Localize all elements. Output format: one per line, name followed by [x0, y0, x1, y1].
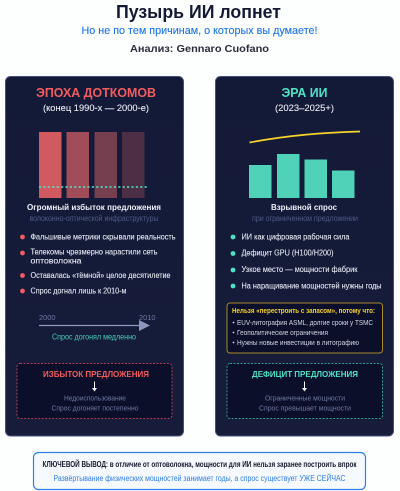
- callout heading: oversupply: ИЗБЫТОК ПРЕДЛОЖЕНИЯ: [43, 369, 149, 379]
- title: Пузырь ИИ лопнет: [116, 1, 281, 22]
- timeline arrow 2000 to 2010: 2010: [139, 313, 155, 322]
- author line: Анализ: Gennaro Cuofano: [130, 43, 269, 55]
- bullet list: dot-com causes: Телекомы чрезмерно нарастили сеть: [30, 248, 158, 256]
- chart caption: oversupply: Огромный избыток предложения: [27, 202, 161, 212]
- chart sub-caption: demand: при ограниченном предложении: [252, 214, 358, 223]
- chart sub-caption: oversupply: волоконно-оптической инфраструктуры: [30, 214, 159, 223]
- bullet list: dot-com causes: Фальшивые метрики скрывали реальность: [30, 232, 176, 242]
- callout heading: why no pre-building: Нельзя «перестроить с запасом», потому что:: [232, 306, 375, 315]
- callout list: reasons: Нужны новые инвестиции в литографию: [237, 338, 359, 347]
- callout text: oversupply: Недоиспользование: [64, 394, 126, 402]
- bar chart: oversupply: [39, 132, 148, 198]
- bullet list: AI causes: ИИ как цифровая рабочая сила: [242, 232, 350, 242]
- bullet list: dot-com causes: Спрос догнал лишь к 2010-м: [30, 286, 127, 296]
- panel: dot-com era: [6, 76, 184, 436]
- key takeaway detail: Развёртывание физических мощностей занимает годы, а спрос существует УЖЕ СЕЙЧАС: [54, 474, 346, 483]
- period: dot-com era: (конец 1990-х — 2000-е): [43, 103, 149, 113]
- timeline arrow 2000 to 2010: 2000: [39, 313, 55, 322]
- callout: deficit: [227, 364, 382, 418]
- bullet list: dot-com causes: Оставалась «тёмной» целое десятилетие: [30, 271, 171, 280]
- callout: oversupply: [17, 364, 172, 418]
- callout list: reasons: Геополитические ограничения: [237, 328, 328, 337]
- callout: oversupply: Спрос догоняет постепенно: [52, 404, 138, 412]
- bullet list: AI causes: [231, 232, 382, 290]
- period: AI era: (2023–2025+): [275, 103, 334, 113]
- panel: AI era: [216, 76, 394, 436]
- subtitle: Но не по тем причинам, о которых вы думаете!: [82, 25, 318, 37]
- heading: dot-com era: ЭПОХА ДОТКОМОВ: [36, 85, 156, 100]
- callout: deficit: Спрос превышает мощности: [259, 404, 351, 412]
- chart caption: demand: Взрывной спрос: [271, 202, 337, 212]
- key takeaway box: [34, 452, 366, 490]
- callout: why no pre-building: [227, 303, 382, 353]
- heading: AI era: ЭРА ИИ: [282, 85, 328, 100]
- bullet list: AI causes: Узкое место — мощности фабрик: [242, 264, 358, 274]
- timeline arrow 2000 to 2010: [39, 313, 155, 331]
- callout list: reasons: EUV-литография ASML, долгие сроки у TSMC: [237, 318, 373, 327]
- callout list: reasons: [233, 318, 373, 347]
- bullet list: AI causes: Дефицит GPU (H100/H200): [242, 248, 334, 258]
- icon: down arrow: [92, 382, 97, 392]
- bullet list: dot-com causes: [20, 232, 175, 296]
- icon: down arrow: [302, 382, 307, 392]
- timeline caption: Спрос догонял медленно: [52, 332, 136, 342]
- bullet list: dot-com causes: оптоволокна: [30, 256, 82, 266]
- callout text: deficit: Ограниченные мощности: [265, 394, 345, 402]
- bar chart: demand with supply curve: [249, 132, 360, 198]
- callout heading: deficit: ДЕФИЦИТ ПРЕДЛОЖЕНИЯ: [252, 369, 358, 379]
